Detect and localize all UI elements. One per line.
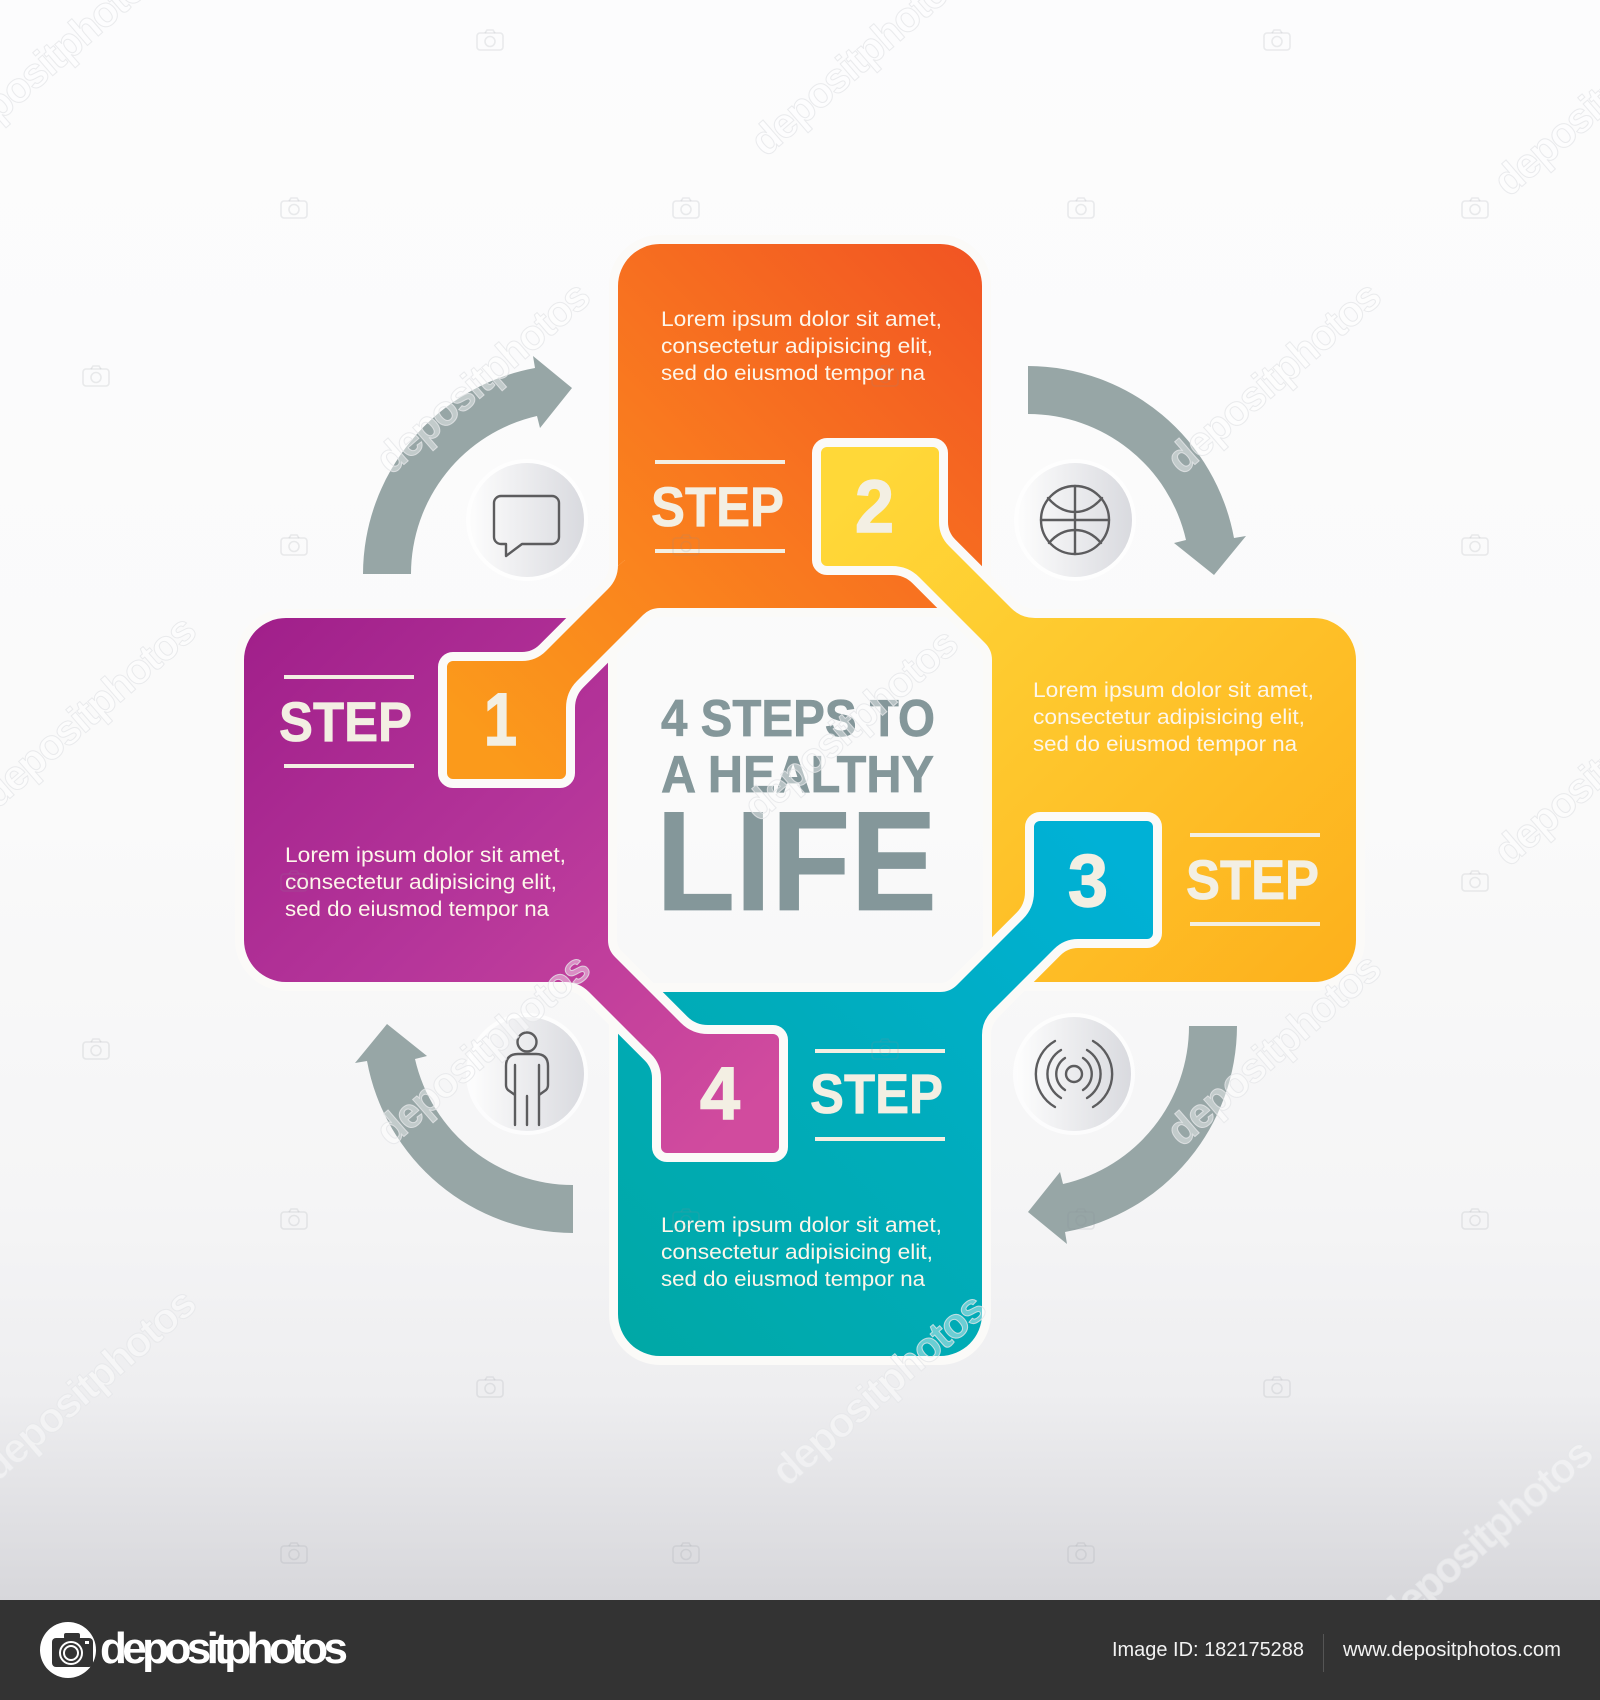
panel: step 1 purple: consectetur adipisicing elit, [285, 870, 557, 894]
panel: step 3 yellow: consectetur adipisicing elit, [1033, 705, 1305, 729]
watermark: depositphotos [366, 271, 599, 483]
panel: step 2 orange: STEP [651, 475, 784, 538]
watermark: depositphotos [1157, 943, 1390, 1155]
panel: step 1 purple: STEP [279, 690, 412, 753]
title: LIFE [656, 782, 937, 941]
panel: step 3 yellow: sed do eiusmod tempor na [1033, 732, 1297, 756]
panel: step 1 purple: sed do eiusmod tempor na [285, 897, 549, 921]
panel: step 1 purple [244, 618, 779, 1153]
title: A HEALTHY [661, 746, 934, 804]
numeral 4: 4 [700, 1052, 740, 1135]
panel: step 4 teal [618, 821, 1153, 1356]
watermark: depositphotos [734, 618, 967, 830]
panel: step 4 teal: sed do eiusmod tempor na [661, 1267, 925, 1291]
panel: step 4 teal: STEP [810, 1062, 943, 1125]
title: 4 STEPS TO [661, 690, 935, 748]
icon: person [466, 1013, 588, 1135]
icon: globe [1014, 459, 1136, 581]
footer bar [0, 1600, 1600, 1700]
title [656, 690, 937, 941]
watermark: depositphotos [366, 943, 599, 1155]
panel: step 3 yellow [821, 447, 1356, 982]
panel: step 1 purple: Lorem ipsum dolor sit amet, [285, 843, 566, 867]
numeral 3: 3 [1068, 839, 1108, 922]
image id: Image ID: 182175288 [1112, 1639, 1304, 1661]
panel: step 2 orange: sed do eiusmod tempor na [661, 361, 925, 385]
arrow: bottom left [355, 1024, 573, 1233]
panel: step 2 orange: consectetur adipisicing elit, [661, 334, 933, 358]
panel: step 2 orange [447, 244, 982, 779]
footer logo wordmark: depositphotos [100, 1624, 348, 1673]
panel: step 3 yellow: STEP [1186, 848, 1319, 911]
number box 1 with orange connector [438, 560, 650, 788]
panel: step 4 teal: consectetur adipisicing elit, [661, 1240, 933, 1264]
icon: depositphotos camera logo [40, 1622, 96, 1678]
icon: signal waves [1013, 1013, 1135, 1135]
panel: step 4 teal: Lorem ipsum dolor sit amet, [661, 1213, 942, 1237]
watermark: depositphotos [1157, 271, 1390, 483]
arrow: top right [1028, 366, 1246, 575]
icon: speech bubble [466, 459, 588, 581]
website url: www.depositphotos.com [1342, 1639, 1561, 1661]
arrow: top left [363, 356, 572, 574]
watermark camera marks [83, 30, 1488, 1563]
numeral 1: 1 [484, 678, 517, 761]
numeral 2: 2 [855, 465, 894, 548]
watermark: depositphotos [1369, 1428, 1600, 1640]
arrow: bottom right [1028, 1026, 1237, 1244]
panel: step 3 yellow: Lorem ipsum dolor sit amet, [1033, 678, 1314, 702]
watermark: depositphotos [762, 1283, 995, 1495]
panel: step 2 orange: Lorem ipsum dolor sit amet, [661, 307, 942, 331]
